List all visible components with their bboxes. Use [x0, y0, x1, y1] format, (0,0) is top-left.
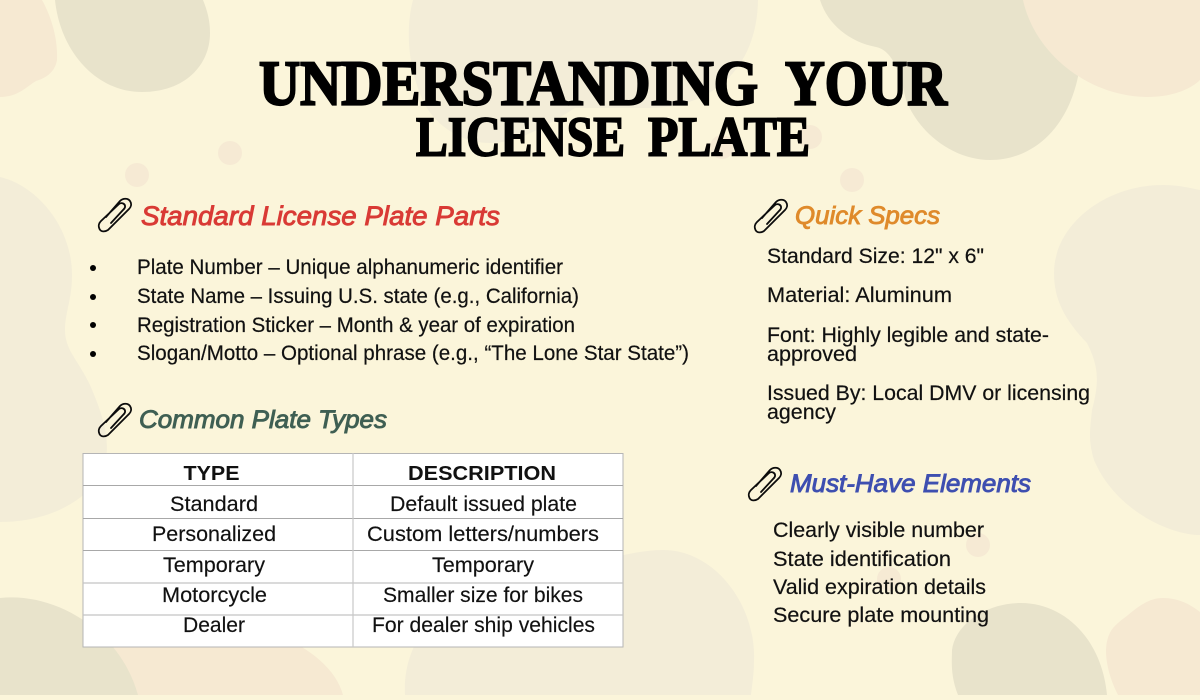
elements list: Clearly visible number — [773, 519, 984, 542]
panel: quick specs — [755, 200, 1090, 424]
specs list: Issued By: Local DMV or licensing — [767, 382, 1090, 405]
bullet list: Plate Number – Unique alphanumeric identifier — [137, 256, 563, 279]
title: PLATE — [648, 106, 810, 168]
panel: must-have elements — [749, 468, 1031, 627]
bullet list — [90, 256, 689, 365]
specs list: agency — [767, 401, 837, 424]
table: Personalized — [152, 523, 276, 546]
table — [83, 453, 623, 647]
heading: standard license plate parts: Standard License Plate Parts — [141, 201, 500, 231]
heading: common plate types: Common Plate Types — [139, 406, 387, 434]
table: Dealer — [183, 614, 245, 637]
panel: standard license plate parts — [90, 199, 689, 365]
table: TYPE — [184, 462, 240, 485]
elements list: State identification — [773, 548, 951, 571]
table: Motorcycle — [162, 584, 267, 607]
table: Temporary — [432, 554, 535, 577]
bullet list: Slogan/Motto – Optional phrase (e.g., “The Lone Star State”) — [137, 342, 689, 365]
specs list — [767, 245, 1090, 424]
table: Standard — [170, 493, 258, 516]
title: YOUR — [785, 48, 948, 118]
specs list: Font: Highly legible and state- — [767, 324, 1049, 347]
elements list: Valid expiration details — [773, 576, 986, 599]
title — [259, 48, 948, 168]
bullet list: State Name – Issuing U.S. state (e.g., California) — [137, 285, 579, 308]
elements list — [773, 519, 989, 627]
table: Smaller size for bikes — [383, 584, 583, 607]
title: UNDERSTANDING — [259, 48, 758, 118]
table: For dealer ship vehicles — [372, 614, 595, 637]
heading: quick specs: Quick Specs — [795, 202, 940, 230]
bullet list: Registration Sticker – Month & year of expiration — [137, 314, 575, 337]
specs list: Material: Aluminum — [767, 284, 952, 307]
icon: paperclip — [755, 200, 787, 232]
icon: paperclip — [99, 404, 131, 436]
specs list: Standard Size: 12" x 6" — [767, 245, 984, 268]
icon: paperclip — [749, 468, 781, 500]
panel: common plate types — [83, 404, 623, 647]
elements list: Secure plate mounting — [773, 604, 989, 627]
table: Custom letters/numbers — [367, 523, 599, 546]
specs list: approved — [767, 343, 857, 366]
icon: paperclip — [99, 199, 131, 231]
table: DESCRIPTION — [408, 462, 556, 485]
heading: must-have elements: Must-Have Elements — [790, 470, 1031, 498]
title: LICENSE — [416, 106, 625, 168]
table: Temporary — [163, 554, 266, 577]
table: Default issued plate — [390, 493, 577, 516]
